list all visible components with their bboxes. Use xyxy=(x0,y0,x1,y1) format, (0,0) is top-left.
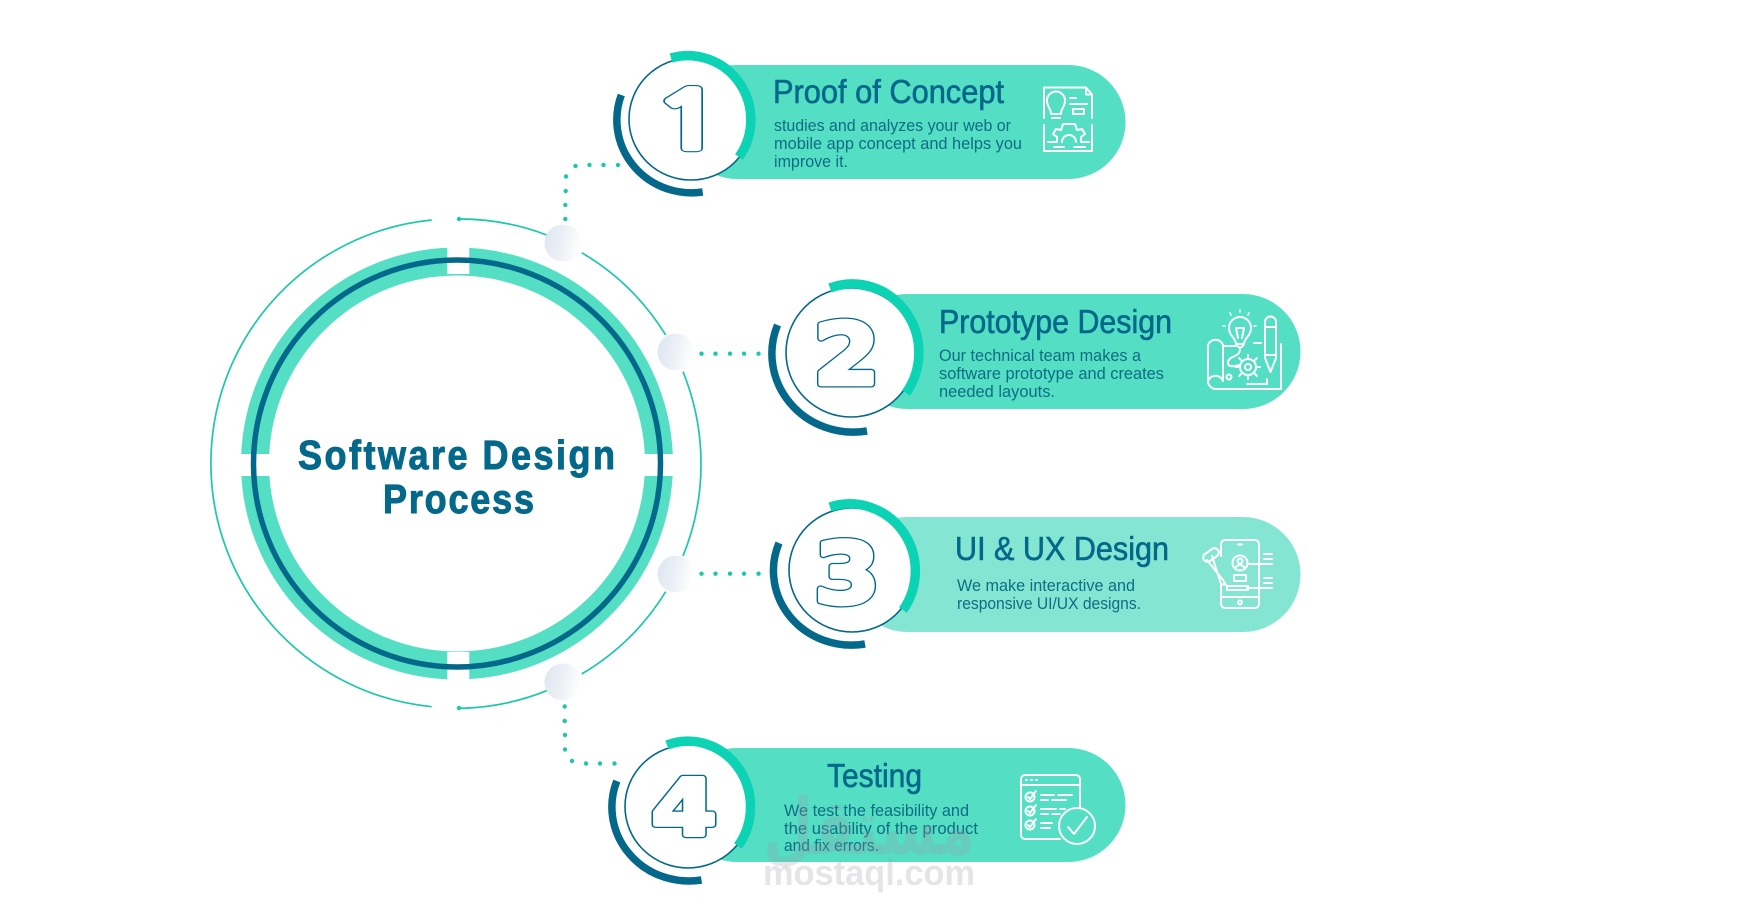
panel: step 3 UI and UX design xyxy=(773,504,1300,645)
title: Software Design xyxy=(298,433,615,479)
description 1: studies and analyzes your web or xyxy=(774,116,1011,135)
badge 2 xyxy=(772,284,919,432)
badge 4: 4 xyxy=(651,763,717,854)
watermark xyxy=(763,783,975,893)
description 3 xyxy=(957,576,1141,613)
badge 2: 2 xyxy=(813,306,880,405)
panel: step 1 proof of concept xyxy=(617,56,1126,193)
node: step 4 xyxy=(544,664,582,700)
central double ring xyxy=(235,238,679,688)
outer thin ring xyxy=(211,217,701,710)
badge 3: 3 xyxy=(814,526,880,624)
badge 1 xyxy=(617,56,753,193)
description 1 xyxy=(774,116,1022,171)
badge 3: 3 xyxy=(814,526,880,624)
pill 1 xyxy=(680,65,1126,179)
watermark: مستقل xyxy=(763,783,975,871)
title xyxy=(298,433,615,523)
dotted connector: step 2 xyxy=(699,352,761,356)
pill 3 xyxy=(850,517,1300,632)
heading 3: UI & UX Design xyxy=(955,530,1169,567)
heading 4: Testing xyxy=(827,757,922,794)
badge 1: 1 xyxy=(653,82,725,162)
heading 2: Prototype Design xyxy=(939,303,1172,340)
node: step 3 xyxy=(658,556,694,592)
dotted connector: step 4 xyxy=(562,704,617,766)
badge 4 xyxy=(612,741,751,881)
node: step 2 xyxy=(658,334,694,370)
panel: step 2 prototype design xyxy=(772,284,1300,432)
description 3: We make interactive and xyxy=(957,576,1135,595)
description 4: We test the feasibility and xyxy=(784,801,969,820)
description 2: Our technical team makes a xyxy=(939,346,1142,365)
panel: step 4 testing xyxy=(612,741,1126,881)
icon: phone with pencil xyxy=(1203,540,1272,608)
icon: blueprint with bulb, gear and pencil xyxy=(1208,310,1281,389)
pill 2 xyxy=(850,294,1300,409)
node: step 1 xyxy=(544,224,582,262)
badge 4: 4 xyxy=(651,763,717,854)
icon: document with bulb and gear xyxy=(1044,88,1092,151)
heading 1: Proof of Concept xyxy=(773,73,1004,110)
badge 1: 1 xyxy=(653,82,725,162)
dotted connector: step 3 xyxy=(699,572,761,576)
description 4 xyxy=(784,801,978,855)
pill 4 xyxy=(680,748,1126,862)
watermark: mostaql.com xyxy=(763,852,975,893)
badge 3 xyxy=(773,504,915,645)
icon: checklist window xyxy=(1021,775,1095,844)
description 2: software prototype and creates xyxy=(939,364,1164,383)
dotted connector: step 1 xyxy=(563,163,620,221)
description 1: improve it. xyxy=(774,152,848,171)
description 1: mobile app concept and helps you xyxy=(774,134,1022,153)
description 4: the usability of the product xyxy=(784,819,978,838)
description 2 xyxy=(939,346,1164,401)
description 2: needed layouts. xyxy=(939,382,1055,401)
title: Process xyxy=(383,477,534,523)
description 3: responsive UI/UX designs. xyxy=(957,594,1141,613)
description 4: and fix errors. xyxy=(784,836,879,855)
badge 2: 2 xyxy=(813,306,880,405)
